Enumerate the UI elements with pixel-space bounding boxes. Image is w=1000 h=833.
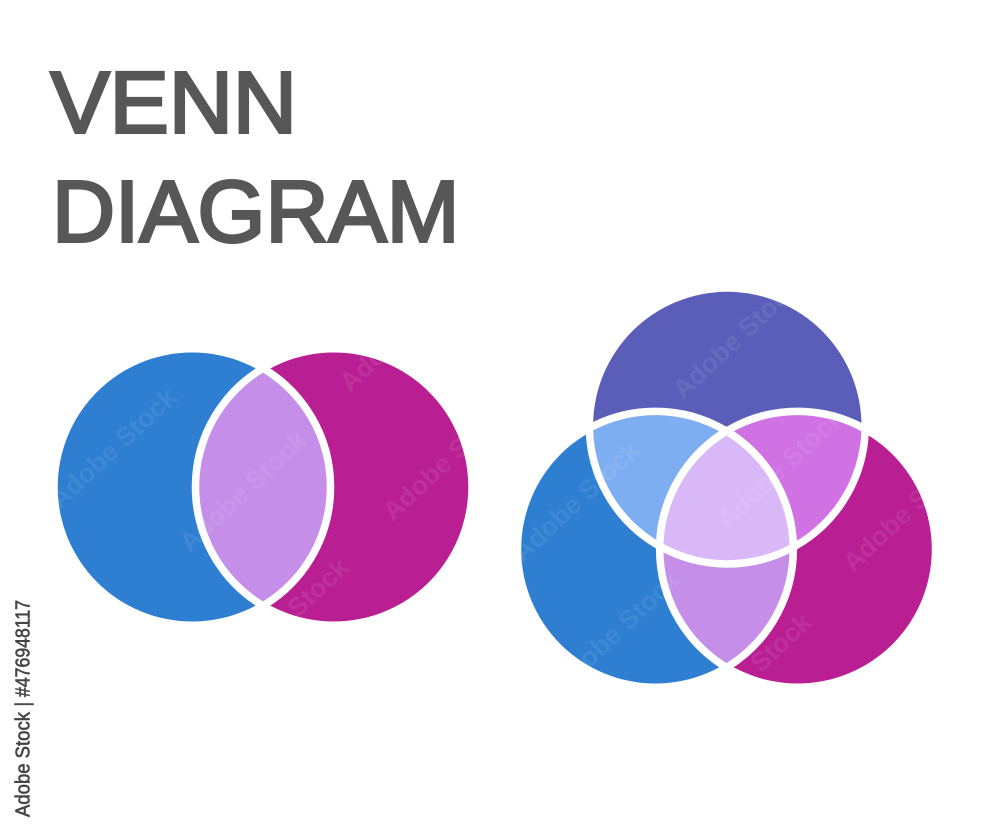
- intersection: top and right: [664, 415, 861, 560]
- watermarks: Adobe Stock: [174, 425, 313, 557]
- watermarks: Adobe Stock: [711, 402, 850, 534]
- watermarks: Adobe Stock: [547, 565, 686, 697]
- watermarks: Adobe Stock: [667, 272, 806, 404]
- stock image id: Adobe Stock: [12, 711, 34, 817]
- title: VENN: [50, 54, 297, 152]
- intersection: top and left: [593, 415, 790, 560]
- title: DIAGRAM: [52, 164, 459, 260]
- watermarks: Adobe Stock: [837, 445, 976, 577]
- watermarks: Adobe Stock: [216, 552, 355, 684]
- watermarks: Adobe Stock: [44, 382, 183, 514]
- intersection: left and right: [199, 373, 327, 601]
- intersection: all three sets: [664, 436, 790, 560]
- watermarks: Adobe Stock: [507, 435, 646, 567]
- circle: left set: [58, 352, 327, 622]
- watermarks: Adobe Stock: [679, 607, 818, 739]
- circle: bottom left set: [521, 415, 790, 684]
- title: [50, 54, 459, 260]
- circle: bottom right set: [663, 415, 932, 684]
- three-set venn diagram: [521, 292, 932, 684]
- circle: right set: [199, 352, 468, 622]
- two-set venn diagram: [58, 352, 468, 622]
- circle: top set: [593, 292, 862, 560]
- stock image id: | #476948117: [12, 600, 34, 706]
- intersection: left and right: [663, 436, 790, 663]
- stock image id: [12, 600, 34, 817]
- watermarks: Adobe Stock: [377, 394, 516, 526]
- watermarks: Adobe Stock: [334, 265, 473, 397]
- watermarks: [44, 265, 976, 739]
